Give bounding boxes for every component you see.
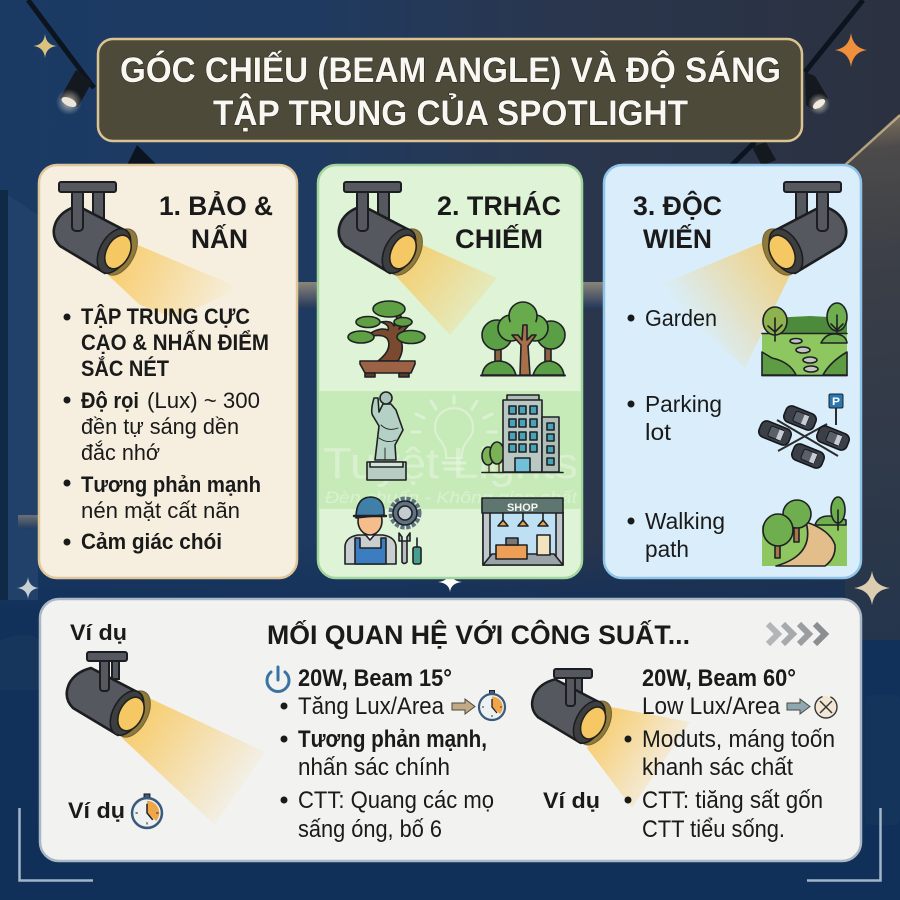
icon: spotlight 1 — [54, 182, 145, 281]
light beam 2 — [395, 243, 497, 335]
icon: spotlight left — [67, 652, 158, 743]
icon: spotlight right — [532, 669, 618, 750]
icon: trees — [481, 302, 565, 376]
title banner: GÓC CHIẾU (BEAM ANGLE) VÀ ĐỘ SÁNG — [120, 50, 781, 90]
icon: technician with tools — [345, 497, 421, 564]
heading 2: 2. TRHÁC — [437, 191, 561, 221]
bullet list 3: lot — [645, 419, 672, 445]
heading 2 — [437, 191, 561, 254]
heading 1: 1. BẢO & — [159, 191, 273, 221]
icon: statue — [367, 392, 406, 480]
bullet list 1: CẠO & NHẤN ĐIỂM — [81, 330, 269, 355]
heading 3: 3. ĐỘC — [633, 191, 722, 221]
light beam 3 — [655, 240, 790, 368]
icon: shop: SHOP — [507, 502, 538, 514]
bullet list 3: Walking — [645, 508, 725, 534]
bullet list 1: đắc nhớ — [81, 440, 160, 465]
corner bracket: bottom left — [20, 808, 93, 880]
column: beam 60 — [624, 665, 837, 843]
panel: relation with power — [40, 599, 861, 861]
bullet list 1: nén mặt cất nãn — [81, 498, 240, 523]
panel: 1. Bảo & Nấn — [39, 165, 297, 578]
column: beam 15: Tăng Lux/Area — [298, 693, 445, 720]
corner bracket: bottom right — [807, 808, 880, 880]
bullet list 1: Tương phản mạnh — [81, 472, 261, 497]
heading 3 — [633, 191, 722, 254]
heading 3: WIẾN — [643, 224, 712, 254]
bullet list 1: TẬP TRUNG CỰC — [81, 304, 250, 329]
icon: bonsai — [348, 301, 425, 377]
icon: building — [482, 395, 563, 472]
title banner — [98, 39, 802, 141]
column: beam 60: khanh sác chất — [642, 754, 793, 781]
bullet list 3 — [628, 305, 725, 562]
label: Ví dụ with stopwatch: Ví dụ — [68, 798, 125, 823]
bullet list 1 — [64, 304, 269, 554]
label: Ví dụ top: Ví dụ — [70, 620, 127, 645]
column: beam 60: Low Lux/Area — [642, 693, 781, 720]
bullet list 3: Parking — [645, 391, 722, 417]
watermark band: Tuyệt Lights — [323, 439, 578, 488]
column: beam 15: nhấn sác chính — [298, 754, 450, 781]
icon: spotlight 2 — [339, 182, 430, 281]
column: beam 60: Moduts, máng toốn — [642, 726, 835, 753]
bullet list 3: Garden — [645, 305, 717, 331]
sparkle: lower center — [438, 571, 462, 592]
sparkle: lower left — [17, 577, 39, 599]
column: beam 15: CTT: Quang các mọ — [298, 787, 494, 814]
icon: spotlight 3 — [755, 182, 846, 281]
bullet list 1: SẮC NÉT — [81, 356, 170, 381]
label: Ví dụ right: Ví dụ — [543, 788, 600, 813]
section heading: MỐI QUAN HỆ VỚI CÔNG SUẤT... — [267, 618, 690, 650]
watermark band: Đèn chuẩn - Không gian chất — [325, 488, 578, 507]
column: beam 60: 20W, Beam 60° — [642, 665, 796, 692]
watermark band — [319, 391, 581, 509]
column: beam 15: 20W, Beam 15° — [298, 665, 452, 692]
column: beam 15: Tương phản mạnh, — [298, 726, 487, 753]
bullet list 3: path — [645, 536, 689, 562]
icon: garden — [762, 303, 847, 376]
panel: 3. Độc Wiến — [604, 165, 861, 578]
bullet list 1: đền tự sáng dền — [81, 414, 239, 439]
column: beam 60: CTT tiểu sống. — [642, 816, 785, 843]
sparkle: top right orange — [835, 33, 867, 67]
icon: power — [267, 667, 289, 691]
icon: shop — [482, 498, 563, 565]
heading 1: NẤN — [191, 224, 248, 254]
column: beam 60: CTT: tiăng sất gốn — [642, 787, 823, 814]
icon: arrow to stopwatch — [452, 690, 505, 720]
label: Ví dụ with stopwatch — [68, 794, 162, 828]
icon: parking lot — [757, 394, 851, 470]
light beam left — [122, 697, 265, 825]
bullet list 1: (Lux) ~ 300 — [147, 388, 260, 413]
title banner: TẬP TRUNG CỦA SPOTLIGHT — [213, 93, 688, 133]
panel: 2. Trhác Chiếm — [318, 165, 582, 578]
sparkle: lower right — [854, 571, 890, 605]
sparkle: top left — [33, 34, 57, 58]
icon: arrow to crossed clock — [787, 696, 837, 718]
column: beam 15: sấng óng, bố 6 — [298, 816, 442, 843]
bullet list 1: Độ rọi — [81, 388, 139, 413]
light beam 1 — [108, 243, 240, 318]
bullet list 1: Cảm giác chói — [81, 529, 222, 554]
icon: walking path — [762, 497, 847, 566]
light beam right — [587, 707, 690, 808]
heading 2: CHIẾM — [455, 224, 543, 254]
heading 1 — [159, 191, 273, 254]
column: beam 15 — [267, 665, 505, 843]
icon: parking lot: P — [832, 396, 840, 408]
icon: chevrons — [768, 624, 825, 644]
